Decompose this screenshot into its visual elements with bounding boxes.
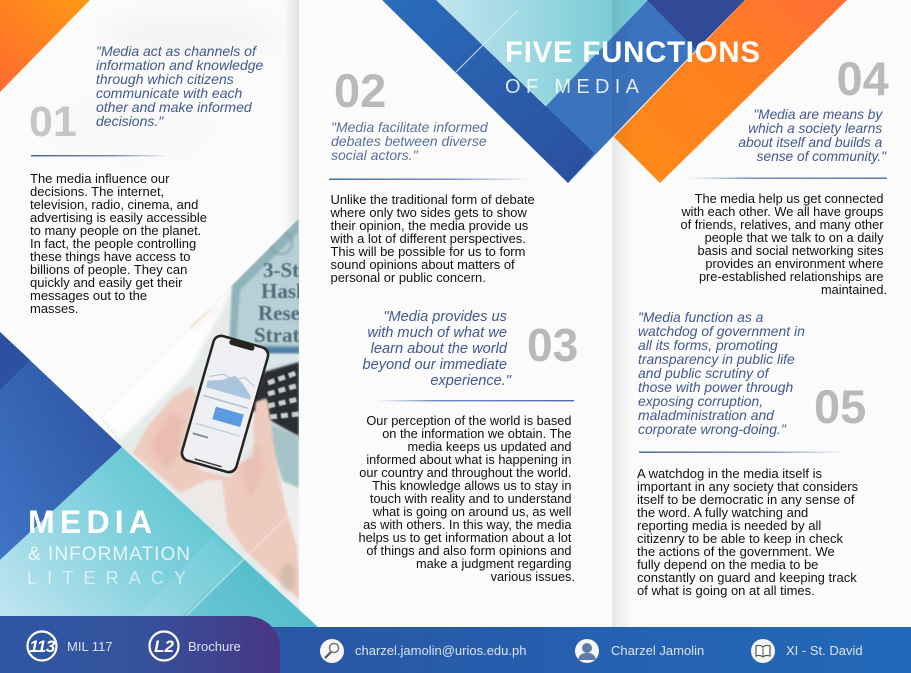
brochure title: media and information literacy [27,504,190,588]
cyan triangle [0,447,318,627]
body 03: media keeps us updated and [408,439,571,454]
quote 02: social actors." [331,147,419,163]
footer left tab [0,616,280,673]
fingers over phone [252,396,272,436]
body 01: The media influence our [30,171,170,186]
body 05: fully depend on the media to be [637,557,818,572]
quote 01: through which citizens [96,71,234,87]
body 04: maintained. [821,282,887,297]
number 03: 03 [527,319,578,371]
table gap between hands [178,480,246,552]
center V banner [382,0,847,183]
body 04: provides an environment where [705,256,883,271]
number 01: 01 [29,98,77,146]
body 02: Unlike the traditional form of debate [330,192,535,207]
body 01: television, radio, cinema, and [30,197,198,212]
body 01: In fact, the people controlling [30,236,196,251]
tattoo [280,563,296,591]
section 03 [359,309,578,584]
cyan triangle [436,0,648,106]
body 03: of things and also form opinions and [366,543,571,558]
quote 05: maladministration and [638,407,775,423]
quote 05: those with power through [638,379,793,395]
laptop [252,354,299,488]
brochure title: media and information literacy: & INFORMATION [28,544,190,565]
section 05 [637,309,866,598]
book cover: Strat [254,323,300,347]
body 03: Our perception of the world is based [366,413,571,428]
quote 01: "Media act as channels of [96,43,258,59]
light blue panel [546,0,696,183]
icon: book [751,639,775,663]
icon: magnifier [320,639,344,663]
course label: MIL 117 [67,639,113,654]
quote 05: "Media function as a [638,309,764,325]
blue triangle [0,332,122,560]
book cover: 3-St [263,258,299,282]
white edge fade [101,286,232,439]
title: five functions [505,36,760,98]
footer bar [0,616,911,673]
body 03: This knowledge allows us to stay in [372,478,571,493]
quote 04: which a society learns [748,121,882,136]
number 02: 02 [334,64,386,117]
body 02: their opinion, the media provide us [330,218,528,233]
quote 04: sense of community." [757,149,887,164]
icon: course badge [28,632,56,660]
body 03: on the information we obtain. The [382,426,571,441]
brochure title: media and information literacy: MEDIA [28,504,152,540]
class: XI - St. David [786,643,863,658]
body 02: with a lot of different perspectives. [330,231,526,246]
body 01: these things have access to [30,249,190,264]
body 01: advertising is easily accessible [30,210,207,225]
section 02 [329,64,538,285]
body 04: basis and social networking sites [698,243,883,258]
body 02: where only two sides gets to show [330,205,527,220]
number 05: 05 [814,380,866,433]
quote 01: communicate with each [96,85,243,101]
quote 02: debates between diverse [331,133,487,149]
table below laptop [270,480,300,610]
quote 05: corporate wrong-doing." [638,421,787,437]
body 05: reporting media is needed by all [637,518,821,533]
body 05: the word. A fully watching and [637,505,808,520]
title: five functions: OF MEDIA [505,76,640,98]
quote 03: with much of what we [367,325,507,341]
quote 05: and public scrutiny of [638,365,771,381]
body 01: quickly and easily get their [30,275,183,290]
body 04: The media help us get connected [695,191,883,206]
quote 05: exposing corruption, [638,393,763,409]
quote 04: "Media are means by [753,107,883,122]
body 05: citizenry to be able to keep in check [637,531,843,546]
body 04: with each other. We all have groups [680,204,883,219]
orange band [614,0,847,183]
body 01: masses. [30,301,78,316]
hands [133,385,300,600]
quote 03: learn about the world [371,341,508,357]
brochure title: media and information literacy: LITERACY [27,568,186,588]
photo: phone in hand [95,215,308,615]
email: charzel.jamolin@urios.edu.ph [355,643,526,658]
body 05: A watchdog in the media itself is [637,466,822,481]
body 01: billions of people. They can [30,262,187,277]
icon: person [575,639,599,663]
body 05: constantly on guard and keeping track [637,570,857,585]
body 03: what is going on around us, as well [372,504,571,519]
body 02: personal or public concern. [330,270,486,285]
body 03: various issues. [491,569,575,584]
section 04 [680,52,889,297]
quote 01: information and knowledge [96,57,264,73]
quote 05: watchdog of government in [638,323,805,339]
body 05: itself to be democratic in any sense of [637,492,855,507]
quote 03: beyond our immediate [363,357,507,373]
book cover: Rese [258,301,300,325]
body 05: of what is going on at all times. [637,583,815,598]
name: Charzel Jamolin [611,643,704,658]
center fold shadow [612,0,634,630]
icon: course badge: 113 [29,637,56,656]
body 03: helps us to get information about a lot [359,530,572,545]
body 04: pre-established relationships are [699,269,883,284]
quote 01: other and make informed [96,99,253,115]
book cover [229,218,308,354]
book cover: Hash [261,279,308,303]
body 05: the actions of the government. We [637,544,835,559]
type label: Brochure [188,639,241,654]
blue band [382,0,594,183]
navy triangle [647,0,745,50]
body 04: people that we talk to on a daily [705,230,884,245]
quote 04: about itself and builds a [738,135,883,150]
quote 02: "Media facilitate informed [331,119,489,135]
icon: level badge [150,632,178,660]
quote 03: experience." [430,373,512,389]
body 03: our country and throughout the world. [359,465,571,480]
body 01: to many people on the planet. [30,223,201,238]
body 02: sound opinions about matters of [330,257,515,272]
body 03: informed about what is happening in [366,452,571,467]
section 01 [29,43,267,316]
orange corner triangle [0,0,90,92]
body 03: as with others. In this way, the media [363,517,572,532]
number 04: 04 [836,52,889,105]
title: five functions: FIVE FUNCTIONS [505,36,760,69]
quote 05: transparency in public life [638,351,795,367]
quote 01: decisions." [96,113,164,129]
body 02: This will be possible for us to form [330,244,525,259]
body 05: important in any society that considers [637,479,859,494]
tan blurred stripes [190,306,218,332]
body 01: decisions. The internet, [30,184,164,199]
phone [178,332,272,476]
body 03: make a judgment regarding [416,556,571,571]
quote 03: "Media provides us [383,309,507,325]
body 04: of friends, relatives, and many other [681,217,884,232]
quote 05: all its forms, promoting [638,337,778,353]
body 01: messages out to the [30,288,147,303]
body 03: touch with reality and to understand [370,491,571,506]
icon: level badge: L2 [154,637,174,656]
